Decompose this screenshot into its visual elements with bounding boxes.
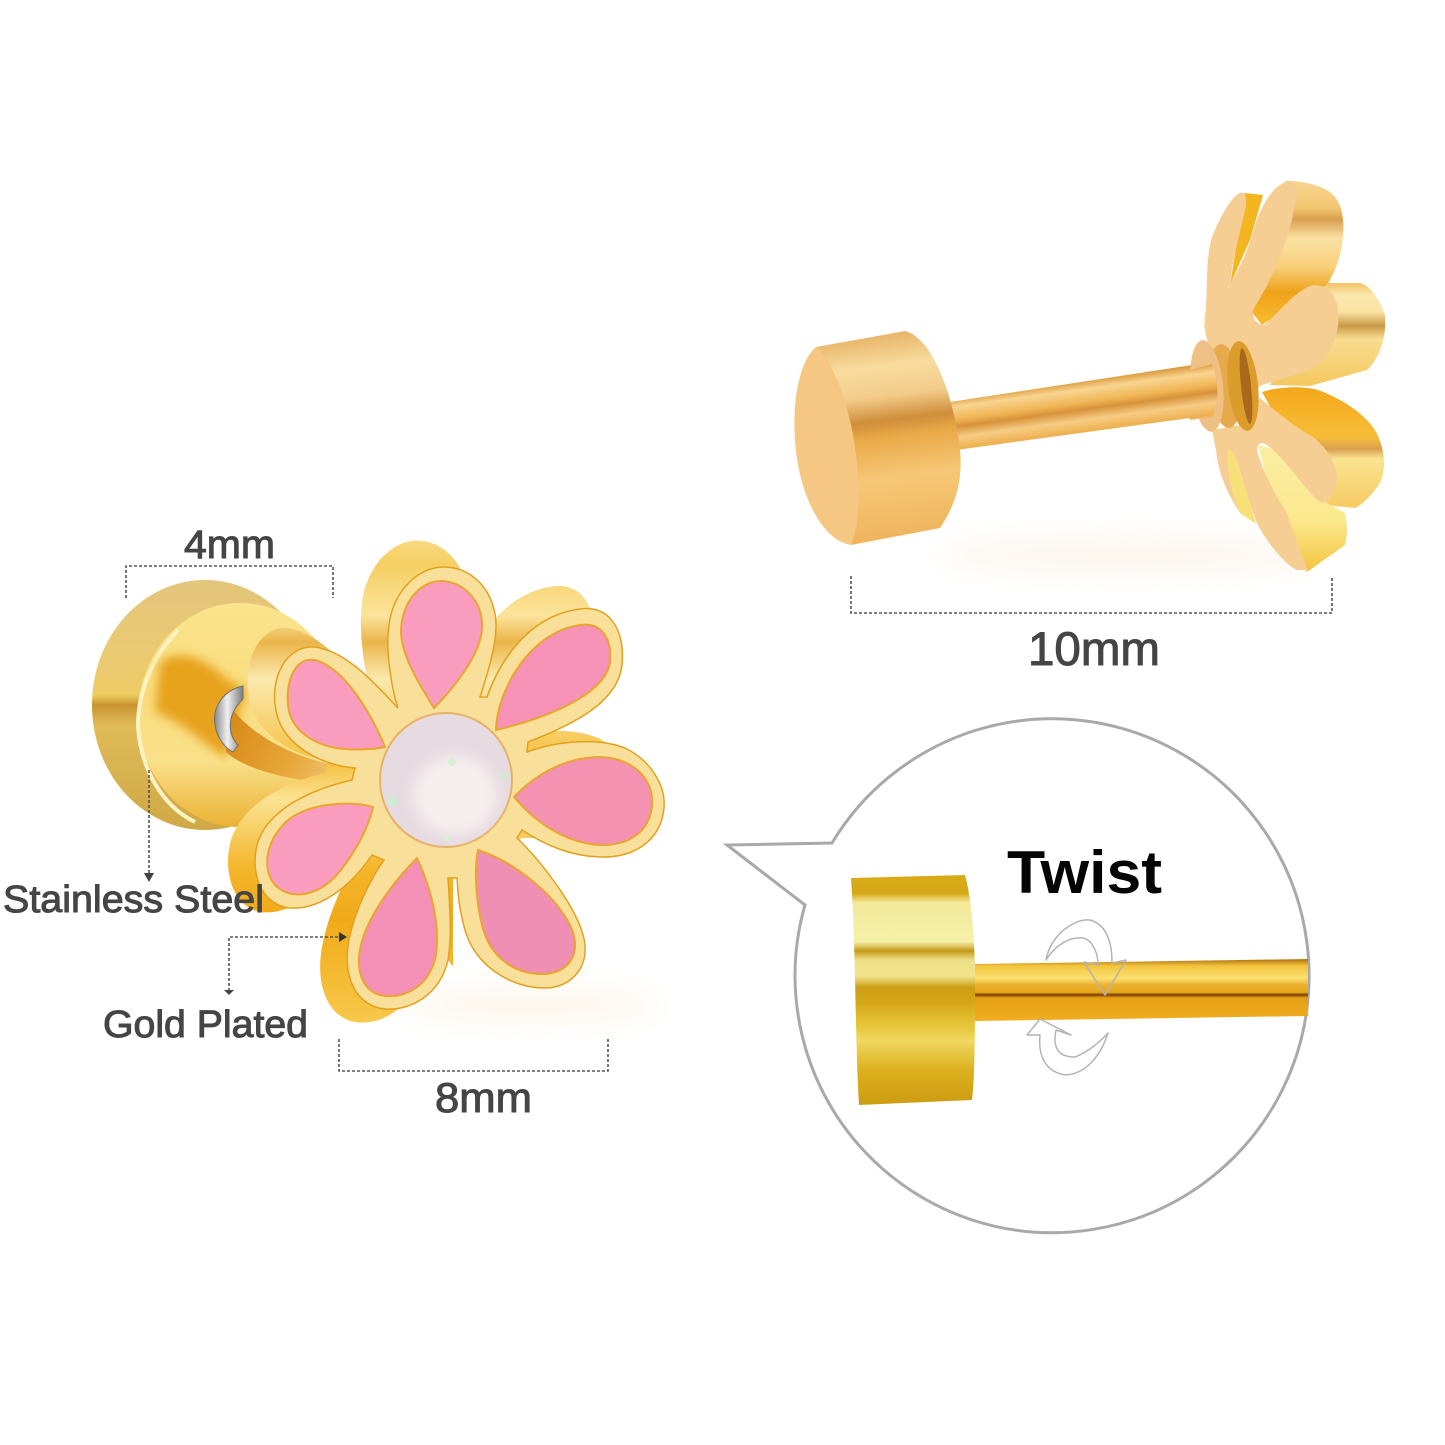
magnified rod: [975, 959, 1308, 1021]
flower rear edge: [228, 541, 637, 1023]
magnified stud: [851, 875, 1308, 1105]
collar washers: [1186, 339, 1263, 433]
magnified cylinder: [851, 875, 975, 1105]
front view flower earring: [92, 541, 664, 1023]
small yellow slot: [1228, 450, 1256, 524]
twist label: Twist: [1007, 839, 1162, 906]
opal centre stone: [380, 713, 512, 847]
4mm dimension: [126, 523, 333, 598]
stainless steel label: [3, 770, 264, 921]
twist rotation arrows: [1027, 920, 1126, 1075]
8mm dimension: 8mm: [435, 1074, 532, 1121]
4mm dimension: 4mm: [184, 523, 275, 567]
10mm dimension: [851, 576, 1332, 675]
side view earring: [794, 181, 1385, 572]
infographic canvas: [4, 180, 1386, 1234]
front earring shadow: [400, 993, 660, 1017]
cylinder face: [794, 347, 859, 545]
back disc of front earring: [92, 580, 352, 830]
steel post: [215, 686, 243, 752]
upper arrow: [1046, 920, 1126, 995]
threaded rod: [950, 362, 1212, 450]
gold plated label: Gold Plated: [103, 1004, 308, 1046]
cylinder back: [816, 331, 961, 545]
gold plated label: [103, 932, 347, 1046]
flower lobes gold edges: [1204, 181, 1385, 572]
lower arrow: [1027, 1019, 1108, 1075]
pink enamel petals: [267, 581, 652, 996]
8mm dimension: [339, 1039, 608, 1121]
10mm dimension: 10mm: [1028, 622, 1160, 675]
flower pale faces: [1205, 182, 1338, 570]
flower gold face: [255, 567, 664, 1009]
stainless steel label: Stainless Steel: [3, 879, 264, 921]
callout bubble: [727, 719, 1309, 1233]
side view earring shadow: [940, 541, 1320, 569]
